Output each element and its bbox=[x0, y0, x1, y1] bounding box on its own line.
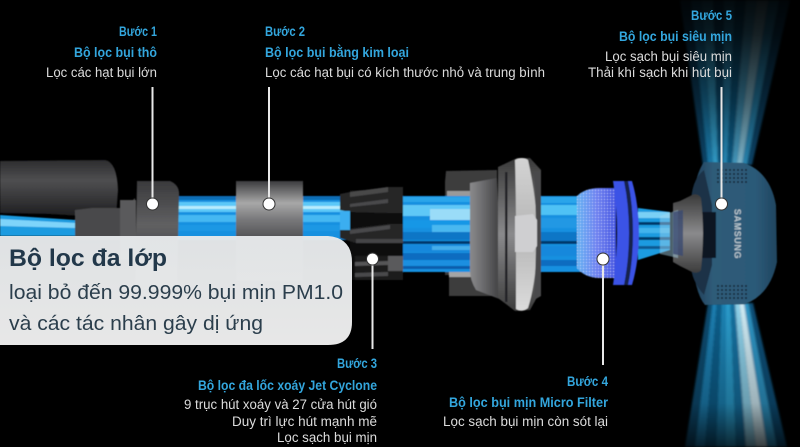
inlet air stream bbox=[0, 215, 76, 236]
cylinder housing bbox=[470, 158, 541, 311]
step 2 metal filter cylinder bbox=[236, 181, 303, 281]
callout step 4: Bước 4 bbox=[567, 373, 608, 389]
callout step 4: Bộ lọc bụi mịn Micro Filter bbox=[449, 394, 608, 410]
callout step 5: Thải khí sạch khi hút bụi bbox=[588, 65, 732, 80]
callout step 5: Bước 5 bbox=[691, 7, 732, 23]
step 5 outlet cap bbox=[691, 162, 777, 305]
info card bbox=[0, 236, 352, 345]
step 3 jet cyclone connector bbox=[340, 187, 403, 280]
callout step 3: Lọc sạch bụi mịn bbox=[277, 430, 377, 445]
pre-motor cup bbox=[660, 194, 716, 273]
housing back shell bbox=[445, 170, 497, 296]
step 1 coarse filter ring bbox=[120, 181, 179, 290]
main air stream bbox=[175, 196, 585, 272]
callout step 5: Lọc sạch bụi siêu mịn bbox=[605, 49, 732, 64]
bottom air plume bbox=[685, 303, 787, 447]
callout step 3: 9 trục hút xoáy và 27 cửa hút gió bbox=[184, 397, 377, 412]
callout step 2 bbox=[263, 23, 545, 210]
callout step 2: Bước 2 bbox=[265, 23, 305, 39]
step 5 outlet cap: SAMSUNG bbox=[733, 209, 743, 259]
callout step 2: Bộ lọc bụi bằng kim loại bbox=[265, 43, 409, 60]
handle tube bbox=[0, 160, 118, 218]
inlet connector bbox=[75, 198, 135, 240]
callout step 4: Lọc sạch bụi mịn còn sót lại bbox=[443, 414, 608, 429]
callout step 1: Bộ lọc bụi thô bbox=[74, 44, 157, 60]
callout step 3 bbox=[184, 253, 378, 445]
callout step 1: Bước 1 bbox=[119, 23, 157, 39]
callout step 3: Bộ lọc đa lốc xoáy Jet Cyclone bbox=[198, 377, 377, 393]
vacuum filter assembly bbox=[0, 158, 777, 311]
card line two: và các tác nhân gây dị ứng bbox=[9, 313, 263, 335]
callout step 3: Duy trì lực hút mạnh mẽ bbox=[232, 414, 377, 429]
callout step 5: Bộ lọc bụi siêu mịn bbox=[619, 28, 732, 44]
callout step 1 bbox=[46, 23, 158, 210]
callout step 1: Lọc các hạt bụi lớn bbox=[46, 65, 157, 80]
callout step 5 bbox=[588, 7, 732, 210]
callout step 4 bbox=[443, 253, 609, 429]
card line one: loại bỏ đến 99.999% bụi mịn PM1.0 bbox=[9, 282, 343, 304]
top air plume bbox=[680, 0, 790, 165]
step 4 micro filter bbox=[577, 181, 670, 285]
callout step 3: Bước 3 bbox=[337, 355, 377, 371]
callout step 2: Lọc các hạt bụi có kích thước nhỏ và trung bình bbox=[265, 65, 545, 80]
card title: Bộ lọc đa lớp bbox=[9, 245, 167, 272]
